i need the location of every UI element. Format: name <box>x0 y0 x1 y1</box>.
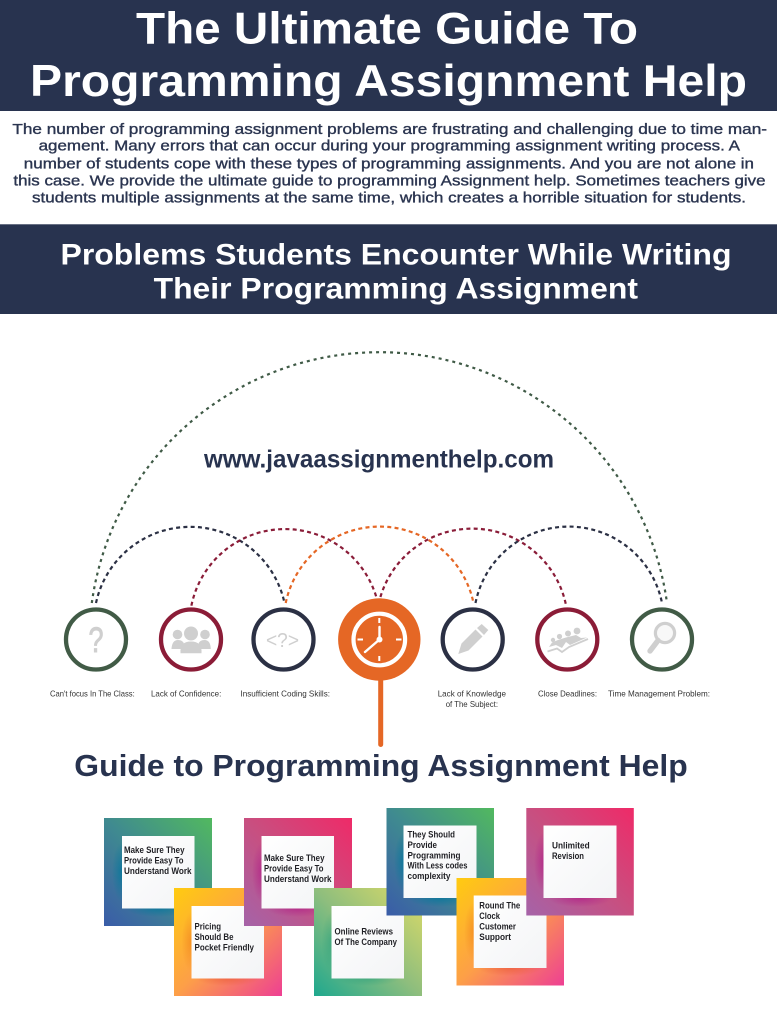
header banner <box>0 0 777 111</box>
card: pricing (orange) <box>174 888 282 996</box>
icon: question mark circle <box>66 610 126 670</box>
heading: guide: Guide to Programming Assignment Help <box>74 749 688 783</box>
card: less code complexity (blue): Provide <box>408 840 437 850</box>
label: lack of confidence: Lack of Confidence: <box>151 688 221 698</box>
label: time management: Time Management Problem: <box>608 688 710 698</box>
card: less code complexity (blue) <box>386 808 494 916</box>
intro text block: this case. We provide the ultimate guide to programming Assignment help. Sometimes teachers give <box>13 174 766 190</box>
card: less code complexity (blue): With Less codes <box>408 861 468 871</box>
intro text block <box>12 122 767 206</box>
website url: www.javaassignmenthelp.com <box>203 445 554 473</box>
label: close deadlines: Close Deadlines: <box>538 688 597 698</box>
card: pricing (orange): Should Be <box>194 932 234 942</box>
label: lack of knowledge <box>438 688 506 709</box>
card: easy to understand (pink): Understand Work <box>264 874 332 884</box>
card: online reviews (green): Of The Company <box>334 937 397 947</box>
label: lack of knowledge: Lack of Knowledge <box>438 688 506 698</box>
icon: question mark circle: ? <box>88 621 104 660</box>
label: can't focus: Can't focus In The Class: <box>50 688 135 698</box>
card: online reviews (green): Online Reviews <box>334 926 393 936</box>
card: round the clock support (orange): Clock <box>479 911 501 921</box>
icon: orange clock with stem <box>338 598 420 747</box>
card: easy to understand (pink): Provide Easy To <box>264 864 324 874</box>
section heading: problems <box>60 238 732 305</box>
card: unlimited revision (pink): Unlimited <box>552 841 590 851</box>
card: easy to understand (blue): Make Sure They <box>124 845 184 855</box>
intro text block: The number of programming assignment problems are frustrating and challenging due to time man- <box>12 122 767 138</box>
intro text block: number of students cope with these types of programming assignments. And you are not alone in <box>24 156 754 172</box>
icon: pencil circle <box>443 610 503 670</box>
dashed connector arcs <box>92 352 667 606</box>
title <box>30 4 747 106</box>
card: round the clock support (orange): Round The <box>479 900 520 910</box>
label: lack of knowledge: of The Subject: <box>446 699 498 709</box>
icon: team on chart circle <box>537 610 597 670</box>
card: pricing (orange): Pricing <box>194 922 221 932</box>
card: easy to understand (pink) <box>244 818 352 926</box>
intro text block: agement. Many errors that can occur during your programming assignment writing process. A <box>39 139 740 155</box>
card: easy to understand (pink): Make Sure They <box>264 853 324 863</box>
title: The Ultimate Guide To <box>136 4 638 54</box>
card: less code complexity (blue): They Should <box>408 830 455 840</box>
card: easy to understand (blue): Understand Work <box>124 866 192 876</box>
card: easy to understand (blue): Provide Easy To <box>124 856 184 866</box>
card: less code complexity (blue): Programming <box>408 850 460 860</box>
intro text block: students multiple assignments at the same time, which creates a horrible situation for students. <box>32 190 746 206</box>
title: Programming Assignment Help <box>30 57 747 106</box>
section heading: problems: Problems Students Encounter While Writing <box>60 238 732 271</box>
card: round the clock support (orange): Customer <box>479 922 516 932</box>
card: easy to understand (blue) <box>104 818 212 926</box>
card: round the clock support (orange): Support <box>479 932 511 942</box>
card: online reviews (green) <box>314 888 422 996</box>
card: unlimited revision (pink): Revision <box>552 851 584 861</box>
icon: code tag circle <box>254 610 314 670</box>
card: pricing (orange): Pocket Friendly <box>194 942 254 952</box>
icon: people group circle <box>161 610 221 670</box>
icon: code tag circle: <?> <box>266 630 299 652</box>
section banner: problems <box>0 224 777 314</box>
section heading: problems: Their Programming Assignment <box>154 272 638 305</box>
card: less code complexity (blue): complexity <box>408 871 450 881</box>
label: insufficient coding skills: Insufficient Coding Skills: <box>240 688 330 698</box>
icon: magnifier circle <box>632 610 692 670</box>
card: round the clock support (orange) <box>456 878 564 986</box>
card: unlimited revision (pink) <box>526 808 634 916</box>
